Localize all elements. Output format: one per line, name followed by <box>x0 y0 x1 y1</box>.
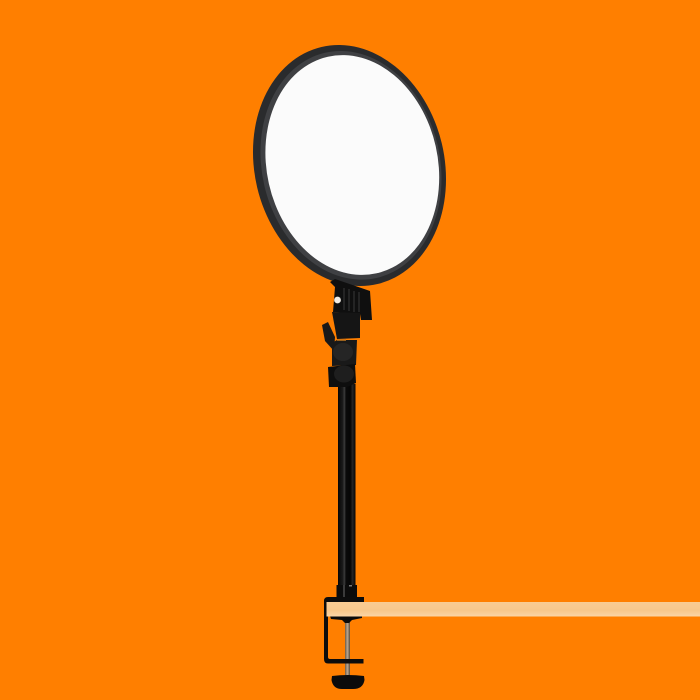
upper joint <box>332 340 357 366</box>
clamp pad <box>330 616 362 623</box>
white screw <box>334 297 341 303</box>
joint cap <box>333 343 353 361</box>
frame highlight <box>238 33 464 298</box>
panel frame <box>229 25 470 306</box>
clamp knob <box>332 675 364 689</box>
diffuser <box>244 38 460 292</box>
tilt knob <box>322 322 335 351</box>
desk board <box>326 602 700 616</box>
mount ribs <box>344 288 359 312</box>
lower cap <box>334 366 354 382</box>
adjustable mount <box>322 279 372 387</box>
clamp screw <box>345 618 350 676</box>
orange gap highlight <box>337 340 346 341</box>
lower joint <box>328 364 356 387</box>
clamp frame <box>324 597 364 664</box>
desk clamp <box>324 597 364 689</box>
stand pole <box>336 384 357 598</box>
mount block <box>332 312 360 339</box>
mount head <box>330 279 372 320</box>
light panel <box>229 25 470 306</box>
